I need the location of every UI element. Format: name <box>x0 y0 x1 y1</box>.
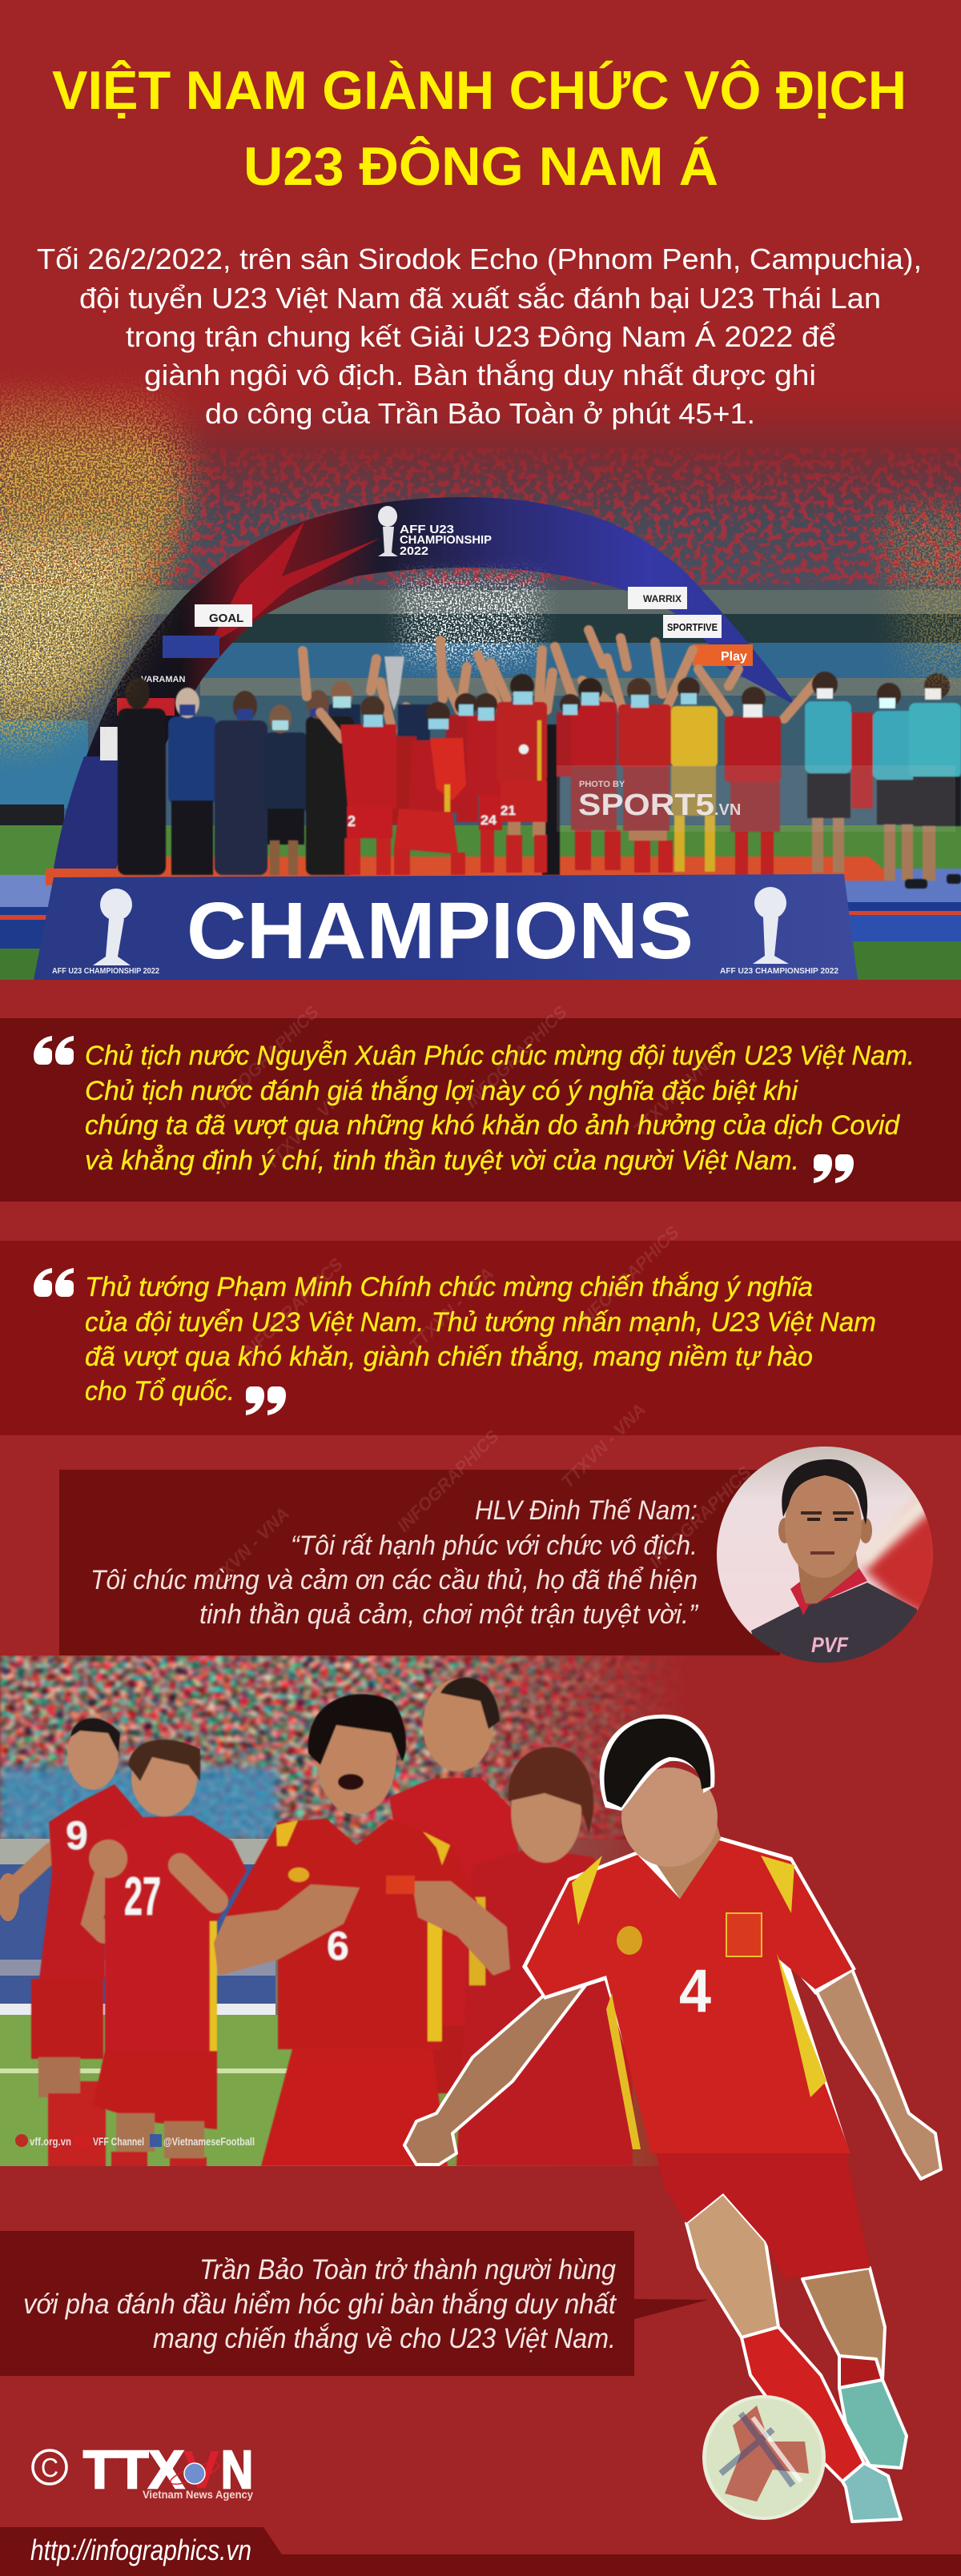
coach quote text: Tôi chúc mừng và cảm ơn các cầu thủ, họ đã thể hiện <box>90 1565 698 1595</box>
quote text <box>85 1041 915 1176</box>
intro paragraph: do công của Trần Bảo Toàn ở phút 45+1. <box>205 397 755 430</box>
social credit line: vff.org.vn <box>30 2135 71 2148</box>
photo watermark: Sport5: SPORT5 <box>578 788 714 822</box>
sponsor boards <box>100 587 753 760</box>
arch logo: 2022 <box>400 544 428 558</box>
player number 27: 27 <box>124 1866 161 1927</box>
neck and face <box>641 1793 721 1899</box>
intro paragraph <box>37 243 922 430</box>
raised arms <box>303 630 818 747</box>
banner caption: AFF U23 CHAMPIONSHIP 2022 <box>720 967 838 976</box>
watermarks: INFOGRAPHICS <box>237 1254 347 1364</box>
top fade into background <box>0 374 961 509</box>
ears <box>778 1518 791 1543</box>
watermarks: INFOGRAPHICS <box>213 1001 323 1112</box>
banner trophy left <box>93 889 132 965</box>
title: U23 ĐÔNG NAM Á <box>243 135 718 197</box>
title: VIỆT NAM GIÀNH CHỨC VÔ ĐỊCH <box>52 59 907 121</box>
hero player Trần Bảo Toàn <box>404 1715 941 2522</box>
banner trophy right <box>753 887 789 964</box>
dignitaries in suits <box>118 677 360 875</box>
logo: TTXVN <box>33 2440 253 2501</box>
shirt <box>751 1583 918 1663</box>
red players <box>340 656 781 875</box>
photo watermark: Sport5: PHOTO BY <box>579 780 625 789</box>
quote text: Chủ tịch nước đánh giá thắng lợi này có ý nghĩa đặc biệt khi <box>85 1076 798 1106</box>
facial features <box>801 1511 822 1515</box>
watermarks: TTXVN - VNA <box>557 1399 649 1492</box>
quote text: của đội tuyển U23 Việt Nam. Thủ tướng nhấn mạnh, U23 Việt Nam <box>85 1307 876 1338</box>
icon: opening quote <box>34 1268 74 1297</box>
quote text: đã vượt qua khó khăn, giành chiến thắng, mang niềm tự hào <box>85 1342 813 1372</box>
intro paragraph: giành ngôi vô địch. Bàn thắng duy nhất được ghi <box>144 359 816 391</box>
caption text: với pha đánh đầu hiểm hóc ghi bàn thắng duy nhất <box>23 2289 617 2320</box>
legs <box>686 2193 907 2522</box>
red players: 24 <box>480 813 497 828</box>
banner caption <box>52 968 838 973</box>
photo watermark: Sport5 <box>557 765 955 832</box>
coach quote text <box>90 1495 699 1630</box>
caption text: mang chiến thắng về cho U23 Việt Nam. <box>153 2323 616 2354</box>
arch logo: AFF U23 <box>400 523 454 536</box>
jersey crest and flag <box>726 1913 762 1956</box>
football <box>702 2395 826 2520</box>
caption text: Trần Bảo Toàn trở thành người hùng <box>199 2254 616 2285</box>
logo: TTXVN: C <box>41 2453 58 2482</box>
panel: prime minister quote <box>0 1241 961 1435</box>
gold confetti <box>0 376 961 740</box>
player number 9: 9 <box>66 1813 88 1858</box>
footer bar <box>0 2527 961 2576</box>
watermarks: INFOGRAPHICS <box>573 1222 683 1332</box>
intro paragraph: trong trận chung kết Giải U23 Đông Nam Á 2022 để <box>126 320 836 353</box>
quote text <box>85 1272 876 1406</box>
gold fade into background <box>0 352 961 456</box>
social credit line: VFF Channel <box>93 2135 144 2148</box>
watermarks: INFOGRAPHICS <box>461 1001 571 1112</box>
coach quote text: HLV Đinh Thế Nam: <box>475 1495 698 1526</box>
logo: TTXVN: N <box>221 2440 253 2500</box>
white jersey edge <box>522 1836 856 2145</box>
arch <box>54 497 797 869</box>
back player <box>389 1678 521 2093</box>
watermarks: INFOGRAPHICS <box>645 1462 755 1572</box>
champions text: CHAMPIONS <box>187 886 694 976</box>
icon: closing quote <box>814 1154 854 1183</box>
quote text: và khẳng định ý chí, tinh thần tuyệt vời của người Việt Nam. <box>85 1146 799 1176</box>
photo: champions celebration <box>0 352 961 980</box>
sponsor boards: WARRIX <box>643 593 682 604</box>
red players: 21 <box>501 803 516 818</box>
photo watermark: Sport5: .VN <box>714 801 741 819</box>
arch logo <box>378 506 492 558</box>
photo: players celebrating <box>0 1655 689 2169</box>
social credit line <box>15 2134 255 2148</box>
intro paragraph: Tối 26/2/2022, trên sân Sirodok Echo (Phnom Penh, Campuchia), <box>37 243 922 275</box>
social credit line: @VietnameseFootball <box>163 2135 255 2148</box>
arms of number 6 <box>214 1884 360 1976</box>
quote text: Chủ tịch nước Nguyễn Xuân Phúc chúc mừng đội tuyển U23 Việt Nam. <box>85 1041 915 1071</box>
player number 27 <box>89 1739 247 2169</box>
panel: hero caption <box>0 2231 708 2376</box>
sponsor boards: GOAL <box>209 612 243 625</box>
red players: 2 <box>348 813 356 829</box>
hair <box>600 1715 714 1811</box>
sponsor boards: Play <box>721 650 747 664</box>
caption text <box>23 2254 617 2354</box>
jersey <box>527 1840 852 2153</box>
watermarks: TTXVN - VNA <box>629 1047 722 1140</box>
coach quote text: “Tôi rất hạnh phúc với chức vô địch. <box>291 1531 698 1561</box>
panel: president quote <box>0 1018 961 1202</box>
neck <box>798 1549 858 1603</box>
trophy <box>384 656 404 711</box>
hair <box>782 1459 867 1525</box>
icon: closing quote <box>246 1386 286 1415</box>
head <box>785 1472 862 1578</box>
collar <box>790 1567 867 1615</box>
red-haired player <box>456 1747 633 2166</box>
player number 6 <box>214 1694 510 2166</box>
quote text: cho Tổ quốc. <box>85 1376 235 1406</box>
watermarks: TTXVN - VNA <box>261 1081 353 1174</box>
shorts <box>649 2129 870 2279</box>
player number 6: 6 <box>327 1924 349 1968</box>
jersey number 4: 4 <box>679 1957 711 2025</box>
intro paragraph: đội tuyển U23 Việt Nam đã xuất sắc đánh bại U23 Thái Lan <box>79 282 881 315</box>
player at left edge <box>0 1873 19 1921</box>
footer url: http://infographics.vn <box>30 2534 251 2566</box>
icon: opening quote <box>34 1036 74 1065</box>
logo: TTXVN: V <box>183 2440 219 2500</box>
quote text: Thủ tướng Phạm Minh Chính chúc mừng chiến thắng ý nghĩa <box>85 1272 813 1302</box>
sponsor boards: SPORTFIVE <box>667 621 718 633</box>
panel: coach quote <box>59 1470 780 1655</box>
team staff in cyan shirts <box>805 672 961 889</box>
title <box>52 59 907 197</box>
logo: TTXVN: TTX <box>83 2440 184 2500</box>
sponsor boards: VARAMAN <box>141 675 185 684</box>
shirt logo: PVF <box>811 1633 849 1657</box>
fountain sparks <box>400 580 541 660</box>
quote text: chúng ta đã vượt qua những khó khăn do ảnh hưởng của dịch Covid <box>85 1110 900 1141</box>
watermarks <box>201 1001 755 1596</box>
podium platforms <box>0 857 961 949</box>
coach portrait <box>717 1446 933 1663</box>
arch logo: CHAMPIONSHIP <box>400 533 492 547</box>
arms <box>404 1969 941 2179</box>
watermarks: TTXVN - VNA <box>405 1263 497 1356</box>
player number 9 <box>10 1718 144 2167</box>
watermarks: TTXVN - VNA <box>201 1503 293 1596</box>
logo: TTXVN: Vietnam News Agency <box>143 2488 253 2501</box>
watermarks: INFOGRAPHICS <box>393 1426 503 1536</box>
banner caption: AFF U23 CHAMPIONSHIP 2022 <box>52 967 159 976</box>
grass foreground <box>0 941 961 980</box>
champions banner <box>34 874 858 980</box>
coach quote text: tinh thần quả cảm, chơi một trận tuyệt vời.” <box>199 1599 699 1630</box>
